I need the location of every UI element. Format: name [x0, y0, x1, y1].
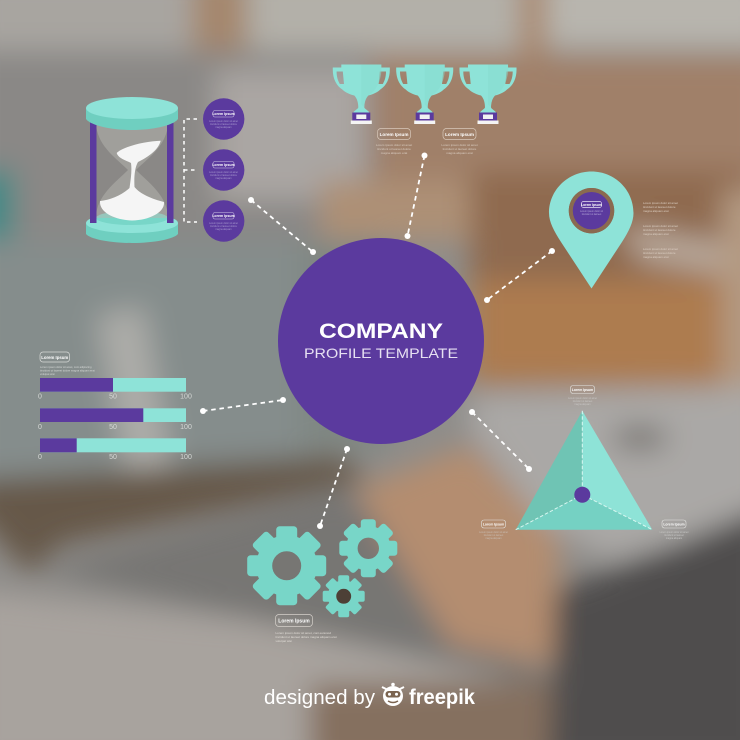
bracket: hourglass dashes	[184, 119, 197, 222]
connector: trophies to centre	[404, 152, 428, 239]
icon: gears	[247, 519, 397, 617]
central circle with title	[278, 238, 484, 444]
footer: designed by freepik: freepik	[409, 686, 475, 709]
hourglass badge 1: Lorem Ipsum	[212, 112, 235, 116]
trophy label left: Lorem Ipsum	[380, 132, 408, 137]
bar chart: 0	[38, 454, 42, 461]
gears label: Lorem ipsum dolor sit amet, coni euismod	[276, 631, 331, 635]
bar chart: 50	[109, 454, 117, 461]
pin text blocks: tincidunt ut laoreet dolore	[643, 228, 676, 232]
hourglass badge 2: Lorem ipsum dolor sit amet	[209, 171, 238, 174]
triangle label top	[568, 386, 597, 406]
hourglass badge 3: Lorem Ipsum	[212, 214, 235, 218]
pin text blocks: tincidunt ut laoreet dolore	[643, 205, 676, 209]
hourglass badge 2: magna aliquam	[215, 177, 232, 180]
icon: three trophies	[333, 64, 517, 124]
bar chart: 100	[180, 424, 192, 431]
icon: location pin	[549, 172, 634, 288]
triangle label left: magna aliquam	[485, 537, 502, 540]
gear large	[247, 526, 326, 605]
bar chart label: Lorem Ipsum	[41, 355, 68, 360]
trophy label right: magna aliquam erat	[446, 151, 473, 155]
pin text blocks: Lorem ipsum dolor sit amet	[643, 201, 678, 205]
trophy label right: Lorem Ipsum	[445, 132, 474, 137]
bar chart label	[40, 352, 95, 376]
trophy label left	[376, 128, 412, 155]
pin text blocks: magna aliquam erat	[643, 232, 669, 236]
gears label: Lorem Ipsum	[278, 618, 310, 624]
gear medium	[339, 519, 397, 577]
triangle label top: magna aliquam	[574, 403, 591, 406]
gears label: volutpat wisi	[276, 639, 292, 643]
bar chart label: tincidunt ut laoreet dolore magna aliquam erat	[40, 368, 95, 372]
hourglass badge 3: tincidunt ut laoreet dolore	[210, 225, 238, 228]
pin text blocks: magna aliquam erat	[643, 255, 669, 259]
hourglass badge 1: tincidunt ut laoreet dolore	[210, 123, 238, 126]
icon: triangle pyramid	[516, 411, 652, 530]
icon: location pin: tincidunt ut laoreet	[582, 213, 602, 216]
bar chart: 50	[109, 424, 117, 431]
trophy label right: tincidunt ut laoreet dolore	[443, 147, 477, 151]
triangle label left: tincidunt ut laoreet	[484, 534, 504, 537]
icon: hourglass	[86, 97, 178, 243]
icon: freepik mascot	[382, 683, 404, 706]
trophy label left: Lorem ipsum dolor sit amet	[376, 143, 412, 147]
connector: pin to centre	[484, 248, 555, 303]
triangle label left: Lorem Ipsum	[483, 522, 504, 526]
gears label: tincidunt ut laoreet dolore magna aliquam erat	[276, 635, 337, 639]
triangle label top: tincidunt ut laoreet	[573, 400, 593, 403]
trophy label right	[441, 128, 478, 155]
connector: bars to centre	[200, 397, 286, 414]
hourglass badge 2: Lorem Ipsum	[212, 163, 235, 167]
footer: designed by freepik: designed by	[264, 687, 375, 709]
icon: location pin: Lorem ipsum dolor sit	[580, 210, 603, 213]
pin text blocks	[643, 201, 678, 259]
footer: designed by freepik	[264, 683, 475, 709]
bar chart: 0	[38, 424, 42, 431]
trophy label left: tincidunt ut laoreet dolore	[377, 147, 411, 151]
trophy label right: Lorem ipsum dolor sit amet	[441, 143, 478, 147]
triangle label right: Lorem ipsum dolor sit amet	[660, 531, 689, 534]
pin text blocks: Lorem ipsum dolor sit amet	[643, 247, 678, 251]
hourglass badge 1: Lorem ipsum dolor sit amet	[209, 120, 238, 123]
hourglass badge 3: magna aliquam	[215, 228, 232, 231]
pin text blocks: magna aliquam erat	[643, 209, 669, 213]
hourglass badge 3: Lorem ipsum dolor sit amet	[209, 222, 238, 225]
connector: hourglass to centre	[248, 197, 316, 255]
pin text blocks: Lorem ipsum dolor sit amet	[643, 224, 678, 228]
bar chart: 100	[180, 394, 192, 400]
triangle label right: tincidunt ut laoreet	[664, 534, 684, 537]
bar chart	[38, 352, 192, 461]
bar chart: 0	[38, 394, 42, 400]
pin text blocks: tincidunt ut laoreet dolore	[643, 251, 676, 255]
icon: location pin: Lorem Ipsum	[581, 203, 602, 207]
connector: gears to centre	[317, 446, 350, 529]
hourglass badge 2	[203, 149, 244, 191]
hourglass badge 3	[203, 200, 244, 242]
gear small	[323, 575, 365, 617]
subtitle: PROFILE TEMPLATE	[304, 345, 458, 361]
gears label	[276, 614, 337, 643]
bar chart label: volutpat wisi	[40, 372, 55, 376]
hourglass badge 1	[203, 98, 244, 140]
hourglass badge 1: magna aliquam	[215, 126, 232, 129]
trophy label left: magna aliquam erat	[381, 151, 407, 155]
title: COMPANY	[319, 319, 443, 343]
bar chart: 100	[180, 454, 192, 461]
connector: triangle to centre	[469, 409, 532, 472]
triangle label left	[479, 520, 508, 540]
triangle label right: magna aliquam	[666, 537, 682, 540]
triangle label left: Lorem ipsum dolor sit amet	[479, 531, 508, 534]
bar chart label: Lorem ipsum dolor sit amet, coni adipiscing	[40, 365, 92, 369]
bar chart: 50	[109, 394, 117, 400]
hourglass badge 2: tincidunt ut laoreet dolore	[210, 174, 238, 177]
triangle label right	[660, 520, 689, 540]
triangle label top: Lorem ipsum dolor sit amet	[568, 397, 597, 400]
triangle label right: Lorem Ipsum	[663, 522, 685, 526]
triangle label top: Lorem Ipsum	[572, 388, 593, 392]
